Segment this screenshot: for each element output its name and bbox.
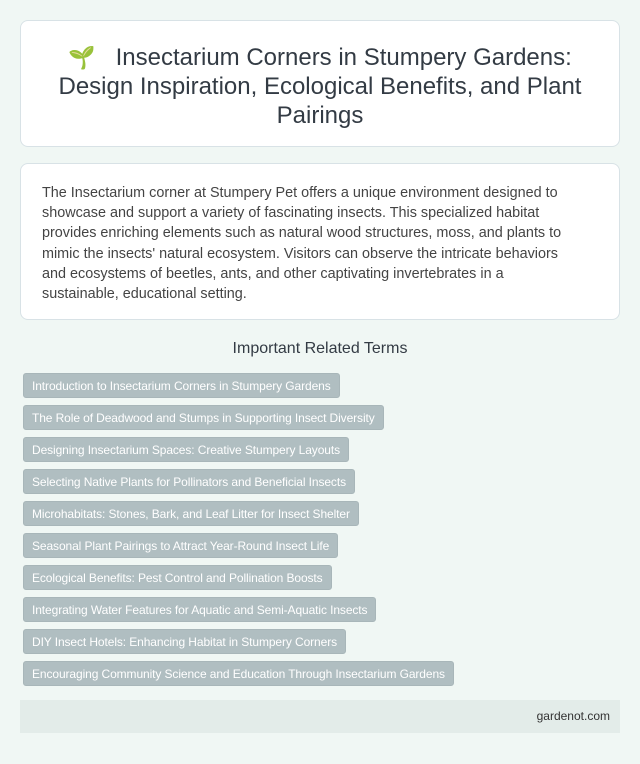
tag list: Seasonal Plant Pairings to Attract Year-Round Insect Life — [32, 539, 329, 553]
footer: gardenot.com — [537, 709, 610, 723]
tag list: Microhabitats: Stones, Bark, and Leaf Litter for Insect Shelter — [32, 507, 350, 521]
footer — [20, 700, 620, 733]
tag list: DIY Insect Hotels: Enhancing Habitat in Stumpery Corners — [32, 635, 337, 649]
description card: The Insectarium corner at Stumpery Pet offers a unique environment designed to showcase and support a variety of fascinating insects. This specialized habitat provides enriching elements such as natural wood structures, moss, and plants to mimic the insects' natural ecosystem. Visitors can observe the intricate behaviors and ecosystems of beetles, ants, and other captivating invertebrates in a sustainable, educational setting. — [42, 185, 561, 302]
tag list: Selecting Native Plants for Pollinators and Beneficial Insects — [32, 475, 346, 489]
tag list: Designing Insectarium Spaces: Creative Stumpery Layouts — [32, 443, 340, 457]
title card: 🌱 Insectarium Corners in Stumpery Gardens: Design Inspiration, Ecological Benefits, and Plant Pairings — [58, 44, 581, 129]
title card — [20, 20, 620, 147]
tag list: Encouraging Community Science and Education Through Insectarium Gardens — [32, 667, 445, 681]
description card — [20, 163, 620, 320]
tag list: Introduction to Insectarium Corners in Stumpery Gardens — [32, 379, 331, 393]
tag list: The Role of Deadwood and Stumps in Supporting Insect Diversity — [32, 411, 375, 425]
heading: related terms: Important Related Terms — [233, 340, 407, 357]
tag list: Integrating Water Features for Aquatic and Semi-Aquatic Insects — [32, 603, 367, 617]
tag list: Ecological Benefits: Pest Control and Pollination Boosts — [32, 571, 323, 585]
tag list — [23, 373, 454, 686]
